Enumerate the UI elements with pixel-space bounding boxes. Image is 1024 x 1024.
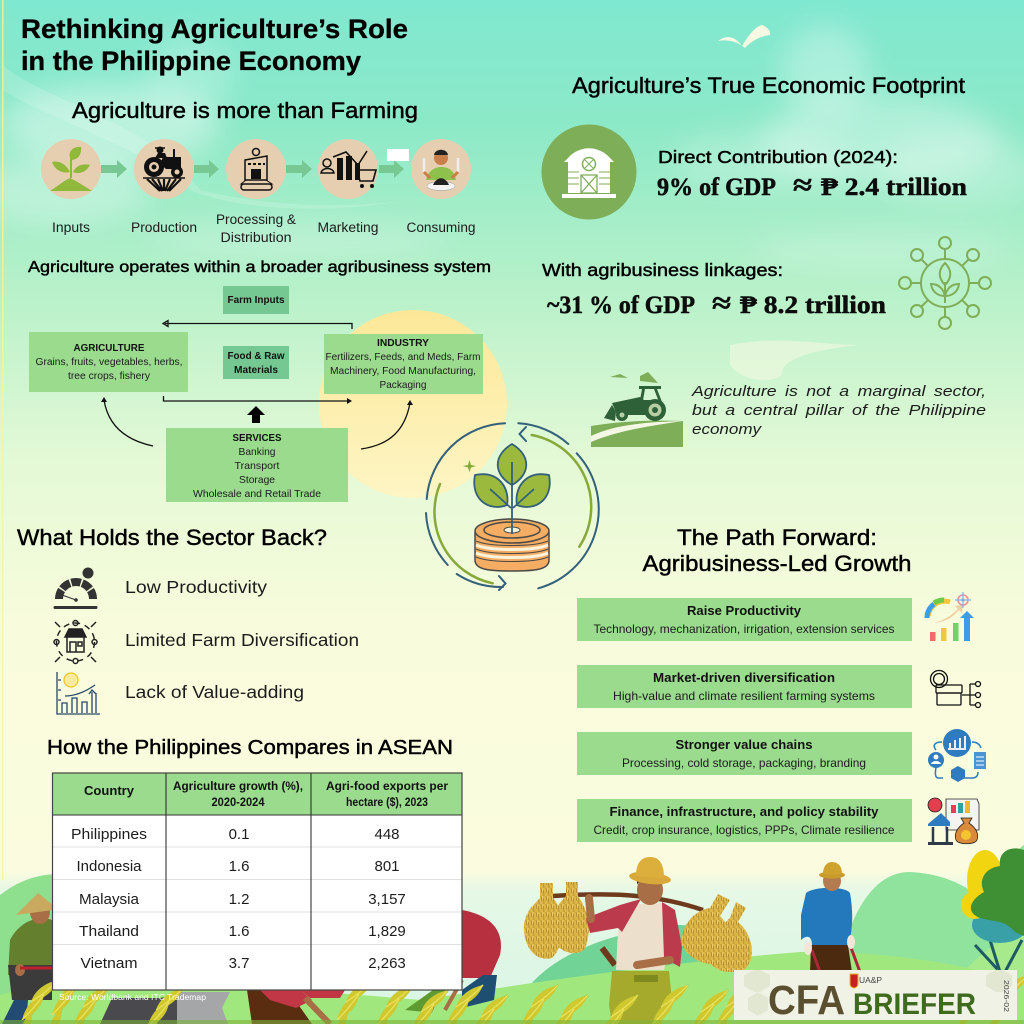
logo: CFA Briefer: 2026-02 bbox=[1002, 980, 1011, 1012]
heading: what holds the sector back: What Holds the Sector Back? bbox=[17, 525, 327, 550]
data rows: 3,157 bbox=[368, 891, 406, 908]
path forward panels bbox=[577, 592, 986, 845]
data rows: Philippines bbox=[71, 826, 147, 843]
stat: with agribusiness linkages: ₱ 8.2 trillion bbox=[740, 292, 886, 319]
step labels: Production bbox=[131, 220, 197, 235]
heading: agriculture is more than farming: Agriculture is more than Farming bbox=[72, 98, 418, 123]
machine bbox=[100, 992, 230, 1024]
data rows: 2,263 bbox=[368, 955, 406, 972]
stat: direct contribution: ₱ 2.4 trillion bbox=[821, 174, 967, 201]
icon: plant network bbox=[899, 237, 991, 329]
step labels: Consuming bbox=[406, 220, 476, 235]
step labels: Marketing bbox=[318, 220, 378, 235]
panel: market-driven diversification: Market-driven diversification bbox=[653, 670, 835, 685]
header row: Country bbox=[84, 783, 135, 798]
plant bbox=[474, 444, 550, 534]
data rows: 1,829 bbox=[368, 923, 406, 940]
icon: marketing chart and cart bbox=[318, 139, 378, 199]
data rows: Malaysia bbox=[79, 891, 140, 908]
stat: with agribusiness linkages: ≈ bbox=[712, 287, 731, 320]
box: services: Transport bbox=[234, 460, 280, 472]
tree bbox=[961, 848, 1024, 972]
arrow: agriculture to industry bbox=[164, 396, 349, 401]
panel: stronger value chains: Stronger value chains bbox=[676, 737, 812, 752]
data rows: 3.7 bbox=[229, 955, 249, 972]
header row: hectare ($), 2023 bbox=[346, 797, 428, 809]
farmer with cone hat, left bbox=[2, 893, 53, 1024]
box: services: Banking bbox=[238, 446, 276, 458]
data rows: 801 bbox=[374, 858, 400, 875]
logo: CFA Briefer: BRIEFER bbox=[853, 988, 976, 1021]
box: agriculture: AGRICULTURE bbox=[74, 342, 144, 354]
data rows: Thailand bbox=[79, 923, 139, 940]
panel: stronger value chains: Processing, cold storage, packaging, branding bbox=[622, 756, 866, 770]
panel: raise productivity: Technology, mechanization, irrigation, extension services bbox=[594, 622, 894, 636]
box: food and raw materials bbox=[223, 346, 289, 379]
data rows: 0.1 bbox=[229, 826, 249, 843]
box: services: Wholesale and Retail Trade bbox=[193, 488, 321, 500]
logo: CFA Briefer bbox=[734, 970, 1017, 1023]
arrow: services up bbox=[247, 406, 265, 423]
panel: market-driven diversification bbox=[577, 665, 912, 708]
icon: tractor production bbox=[134, 139, 194, 199]
data rows bbox=[71, 826, 406, 972]
stat: direct contribution bbox=[657, 147, 967, 202]
icon: bird bbox=[718, 25, 770, 48]
box: food and raw materials: Food & Raw bbox=[228, 350, 285, 362]
heading: the path forward: The Path Forward: bbox=[677, 525, 877, 550]
icon: low productivity gauge bbox=[54, 568, 98, 609]
icon: limited diversification store bbox=[54, 620, 97, 664]
icon: tractor on field bbox=[591, 372, 683, 447]
panel: finance infrastructure policy: Finance, infrastructure, and policy stability bbox=[610, 804, 879, 819]
value chain flow bbox=[41, 139, 476, 245]
icon: factory processing bbox=[226, 139, 286, 199]
header row: 2020-2024 bbox=[212, 797, 265, 809]
stat: direct contribution: ≈ bbox=[793, 169, 812, 202]
logo: CFA Briefer: UA&P bbox=[859, 976, 882, 985]
box: industry: Fertilizers, Feeds, and Meds, Farm bbox=[326, 351, 481, 363]
header row: Agri-food exports per bbox=[326, 781, 449, 793]
heading: broader agribusiness system: Agriculture operates within a broader agribusiness system bbox=[28, 259, 491, 276]
box: agriculture bbox=[29, 332, 188, 392]
icon: lack of value-adding chart bbox=[57, 672, 100, 714]
arrow: industry to agriculture bbox=[163, 320, 352, 329]
box: industry: Packaging bbox=[380, 379, 427, 391]
box: agriculture: Grains, fruits, vegetables, herbs, bbox=[36, 356, 182, 368]
source note: Source: Worldbank and ITC Trademap bbox=[59, 993, 207, 1002]
panel: finance infrastructure policy: Credit, crop insurance, logistics, PPPs, Climate resilience bbox=[594, 823, 895, 837]
callout: central pillar: but a central pillar of the Philippine bbox=[692, 402, 986, 419]
box: industry: Machinery, Food Manufacturing, bbox=[330, 365, 476, 377]
arrows between steps bbox=[101, 160, 404, 178]
icon: investment portfolio bbox=[930, 670, 980, 708]
header row: Agriculture growth (%), bbox=[173, 781, 303, 793]
arrowhead bbox=[347, 398, 352, 404]
label: Low Productivity bbox=[125, 577, 267, 597]
barriers list bbox=[54, 568, 359, 714]
icon: barn bbox=[542, 124, 636, 220]
heading: the path forward bbox=[642, 525, 912, 576]
box: agriculture: tree crops, fishery bbox=[68, 370, 151, 382]
icon: value chain cycle bbox=[928, 729, 986, 782]
box: industry: INDUSTRY bbox=[377, 337, 429, 349]
heading: the path forward: Agribusiness-Led Growth bbox=[642, 551, 912, 576]
panel: finance infrastructure policy bbox=[577, 799, 912, 842]
label: Lack of Value-adding bbox=[125, 682, 304, 702]
box: services: SERVICES bbox=[232, 432, 282, 444]
farmer in blue sweater bbox=[801, 862, 860, 972]
sparkle bbox=[463, 460, 476, 472]
stat: direct contribution: Direct Contribution (2024): bbox=[658, 147, 898, 167]
data rows: Vietnam bbox=[80, 955, 138, 972]
back hills bbox=[0, 845, 1024, 1024]
box: services bbox=[166, 428, 348, 502]
icon: seedling inputs bbox=[41, 139, 101, 199]
data rows: 1.6 bbox=[229, 858, 249, 875]
arrow: services to industry bbox=[361, 400, 413, 449]
callout: central pillar: economy bbox=[692, 421, 763, 438]
title: Rethinking Agriculture’s Role bbox=[21, 14, 408, 44]
callout: central pillar bbox=[691, 383, 986, 438]
box: farm inputs: Farm Inputs bbox=[228, 294, 285, 306]
header row bbox=[84, 781, 449, 809]
icon: person eating bbox=[411, 139, 471, 199]
stat: with agribusiness linkages: ~31 % of GDP bbox=[547, 292, 695, 319]
title: in the Philippine Economy bbox=[21, 46, 361, 76]
step labels: Processing & bbox=[216, 212, 296, 227]
step labels: Distribution bbox=[220, 230, 292, 245]
stat: with agribusiness linkages bbox=[542, 260, 886, 320]
stat: with agribusiness linkages: With agribusiness linkages: bbox=[542, 260, 783, 280]
box: farm inputs bbox=[223, 286, 289, 314]
icon: productivity gauge and bars bbox=[927, 592, 974, 641]
stat: direct contribution: 9% of GDP bbox=[657, 174, 776, 201]
sun bbox=[319, 310, 507, 498]
icon: finance building and money bag bbox=[928, 798, 979, 845]
arrow: services to agriculture bbox=[101, 397, 153, 446]
panel: raise productivity bbox=[577, 598, 912, 641]
white patch bbox=[387, 149, 409, 161]
circular arrows bbox=[426, 423, 599, 590]
logo: CFA Briefer: CFA bbox=[768, 977, 845, 1023]
data rows: Indonesia bbox=[76, 858, 142, 875]
heading: ASEAN comparison: How the Philippines Compares in ASEAN bbox=[47, 736, 453, 759]
box: food and raw materials: Materials bbox=[234, 364, 278, 376]
title bbox=[21, 14, 408, 76]
agribusiness diagram bbox=[29, 286, 483, 502]
heading: true economic footprint: Agriculture’s True Economic Footprint bbox=[572, 73, 965, 98]
bending farmers bbox=[247, 910, 501, 1024]
data rows: 1.6 bbox=[229, 923, 249, 940]
box: services: Storage bbox=[239, 474, 275, 486]
step labels bbox=[52, 212, 476, 245]
central icon: plant growing on coins bbox=[426, 423, 599, 590]
data rows: 448 bbox=[374, 826, 400, 843]
box: industry bbox=[324, 334, 483, 394]
panel: stronger value chains bbox=[577, 732, 912, 775]
bottom farm scene bbox=[0, 845, 1024, 1024]
panel: market-driven diversification: High-value and climate resilient farming systems bbox=[613, 689, 875, 703]
coins bbox=[475, 519, 549, 571]
data rows: 1.2 bbox=[229, 891, 249, 908]
label: Limited Farm Diversification bbox=[125, 630, 359, 650]
callout: central pillar: Agriculture is not a marginal sector, bbox=[691, 383, 986, 400]
farmer carrying rice bbox=[524, 857, 752, 1024]
panel: raise productivity: Raise Productivity bbox=[687, 603, 802, 618]
table: ASEAN comparison bbox=[52, 773, 462, 990]
wheat foreground bbox=[0, 970, 1024, 1024]
step labels: Inputs bbox=[52, 220, 90, 235]
